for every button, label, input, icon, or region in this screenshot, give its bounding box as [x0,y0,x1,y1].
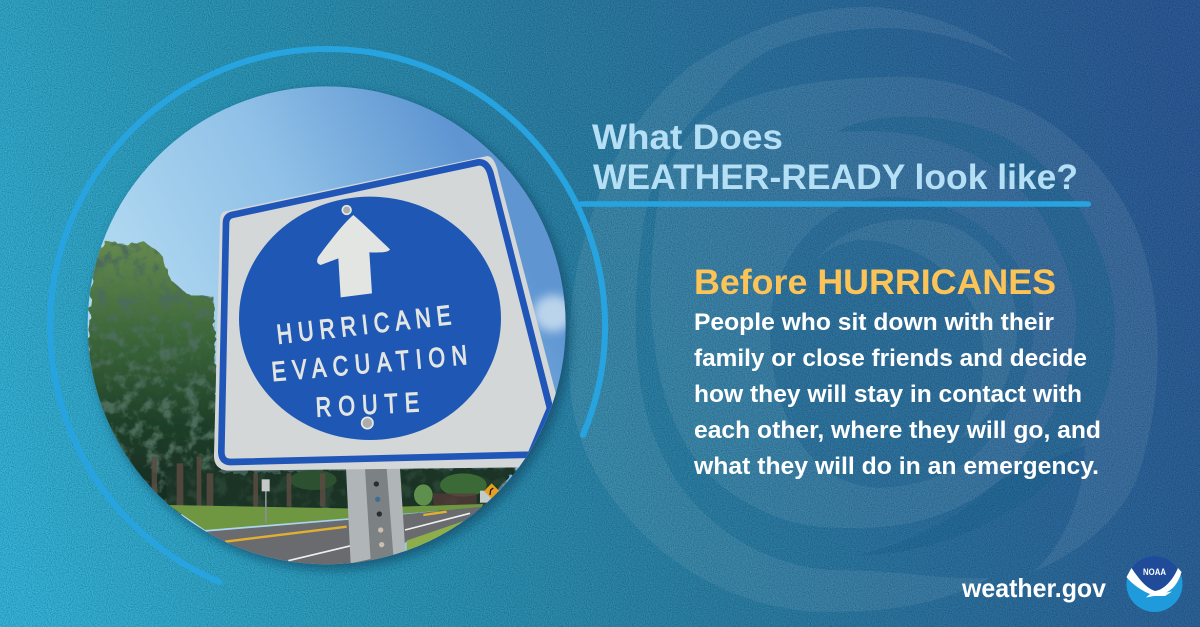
sign blue disc [239,197,501,440]
body text: each other, where they will go, and [694,417,1101,444]
icon: NOAA logo [1126,556,1182,612]
website: weather.gov [961,573,1107,603]
background treeline [167,467,517,508]
small roadside sign [262,479,270,523]
sign wording: EVACUATION [270,341,468,388]
title: What Does [592,118,783,157]
body text: how they will stay in contact with [694,381,1082,408]
circular arc frame [50,49,605,582]
body text [693,309,1101,480]
sign wording: HURRICANE [275,301,453,350]
sign bolts [342,206,373,429]
sign wording [270,301,468,423]
road markings [225,512,447,542]
shrubs [290,470,487,506]
grass [168,504,483,530]
sign panel [214,156,557,471]
tree trunks [152,457,325,510]
title: WEATHER-READY look like? [593,158,1078,197]
body text: what they will do in an emergency. [693,453,1099,480]
horizontal rule under title [578,201,1091,207]
sky [80,80,580,580]
subheading: Before HURRICANES [694,263,1056,302]
sign post [346,468,405,563]
hurricane spiral watermark [569,7,1158,612]
roadside grass [406,520,464,550]
photo shadow [91,90,571,570]
sign wording: ROUTE [315,388,420,423]
orange curve sign [480,483,499,503]
trees [83,243,520,513]
sign blue border [221,162,550,462]
sign arrow [317,215,390,297]
body text: family or close friends and decide [694,345,1087,372]
icon: NOAA logo: NOAA [1143,567,1166,578]
body text: People who sit down with their [694,309,1054,336]
cloud [533,295,573,332]
title [592,118,1078,197]
road [206,506,482,564]
photo: hurricane evacuation route sign [80,80,580,580]
